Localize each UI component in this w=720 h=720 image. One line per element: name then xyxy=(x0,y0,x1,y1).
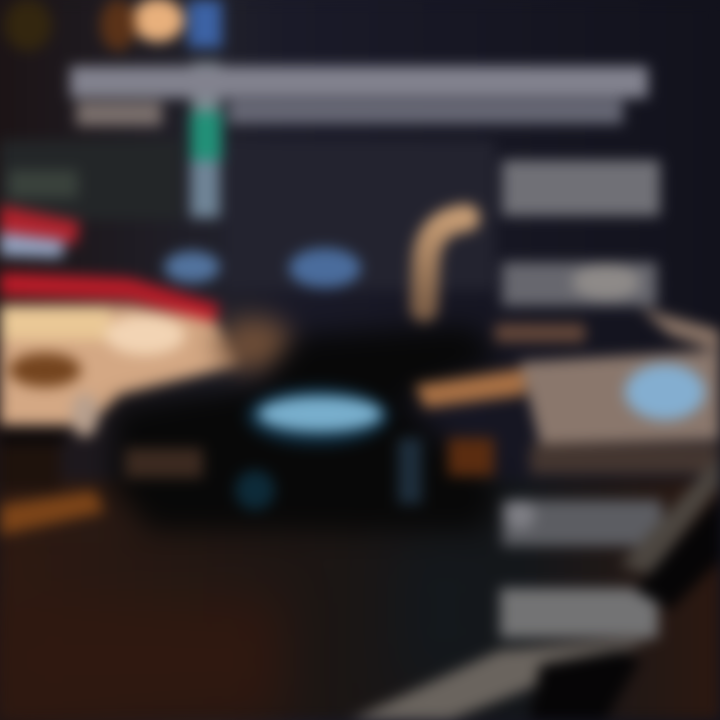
right light panel xyxy=(495,308,720,474)
top-left street lights xyxy=(4,0,222,51)
car: dark body xyxy=(110,325,500,530)
lower-left kerb xyxy=(0,430,105,535)
left sign: red and blue xyxy=(0,170,80,258)
text block: right middle xyxy=(502,262,657,306)
upper diagonal road band xyxy=(620,455,720,575)
text block: right upper xyxy=(502,160,660,216)
storefront: red awning and cream glow xyxy=(0,272,293,437)
car windshield: blue glow xyxy=(246,386,390,446)
orange side panel of car xyxy=(415,368,525,476)
title band xyxy=(70,66,648,126)
text block: bottom right xyxy=(500,588,658,638)
vertical street sign xyxy=(164,62,222,283)
dark diagonal shadow xyxy=(530,495,720,720)
text block: lower right xyxy=(502,500,662,546)
diagonal road marking xyxy=(350,640,650,720)
blue light above car xyxy=(289,248,361,288)
curved tan lamp xyxy=(424,218,466,308)
